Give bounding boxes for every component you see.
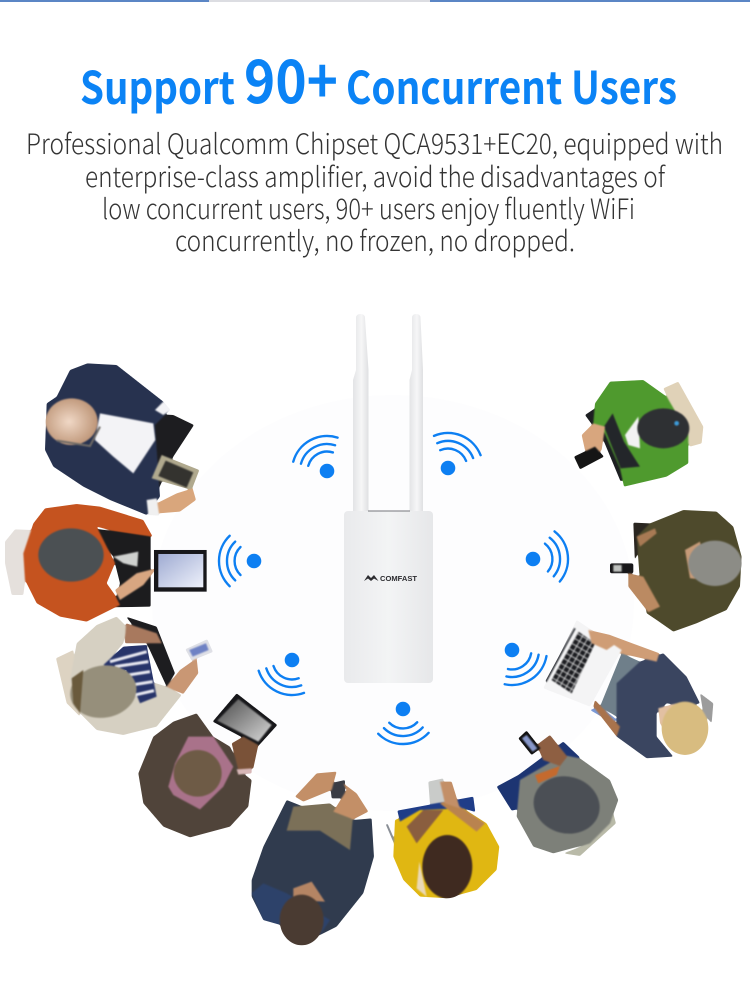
wifi signal: left: [219, 536, 261, 586]
top navigation bar: [0, 0, 750, 2]
wifi signal: top left: [288, 428, 343, 478]
title: [80, 34, 677, 121]
router logo: COMFAST: [380, 574, 417, 583]
title: 90+: [244, 34, 338, 121]
person: woman in striped top and cream cardigan: [56, 617, 213, 735]
person: man in brown jacket with pink scarf: [138, 693, 277, 837]
right antenna: [410, 314, 423, 511]
router with two antennas: [344, 314, 433, 683]
left antenna: [353, 314, 368, 511]
description text: [26, 123, 723, 260]
wifi signal: right: [526, 530, 570, 583]
person: man in olive shirt with grey hair: [610, 510, 742, 632]
tablet on table, left: [154, 550, 207, 592]
person: woman in green sweater: [574, 380, 703, 487]
person: man in dark blue suit: [252, 772, 374, 945]
wifi signal: lower right: [499, 643, 552, 693]
round meeting table: [152, 395, 634, 811]
title: Concurrent Users: [346, 52, 677, 117]
person: woman in yellow top: [387, 778, 499, 898]
description text: low concurrent users, 90+ users enjoy fluently WiFi: [102, 188, 635, 228]
wifi signal: top right: [430, 426, 485, 475]
router body: [344, 511, 433, 683]
wifi signal: bottom: [378, 702, 429, 744]
person: blonde woman with laptop: [543, 620, 713, 758]
person: bald man in navy suit: [45, 363, 199, 516]
description text: concurrently, no frozen, no dropped.: [175, 220, 575, 260]
title: Support: [80, 52, 235, 117]
person: man in orange sweater: [5, 504, 157, 622]
wifi signal: lower left: [254, 653, 309, 703]
router logo: [364, 574, 417, 583]
person: woman with grey hair in grey top: [497, 731, 618, 856]
description text: enterprise-class amplifier, avoid the disadvantages of: [85, 156, 666, 196]
